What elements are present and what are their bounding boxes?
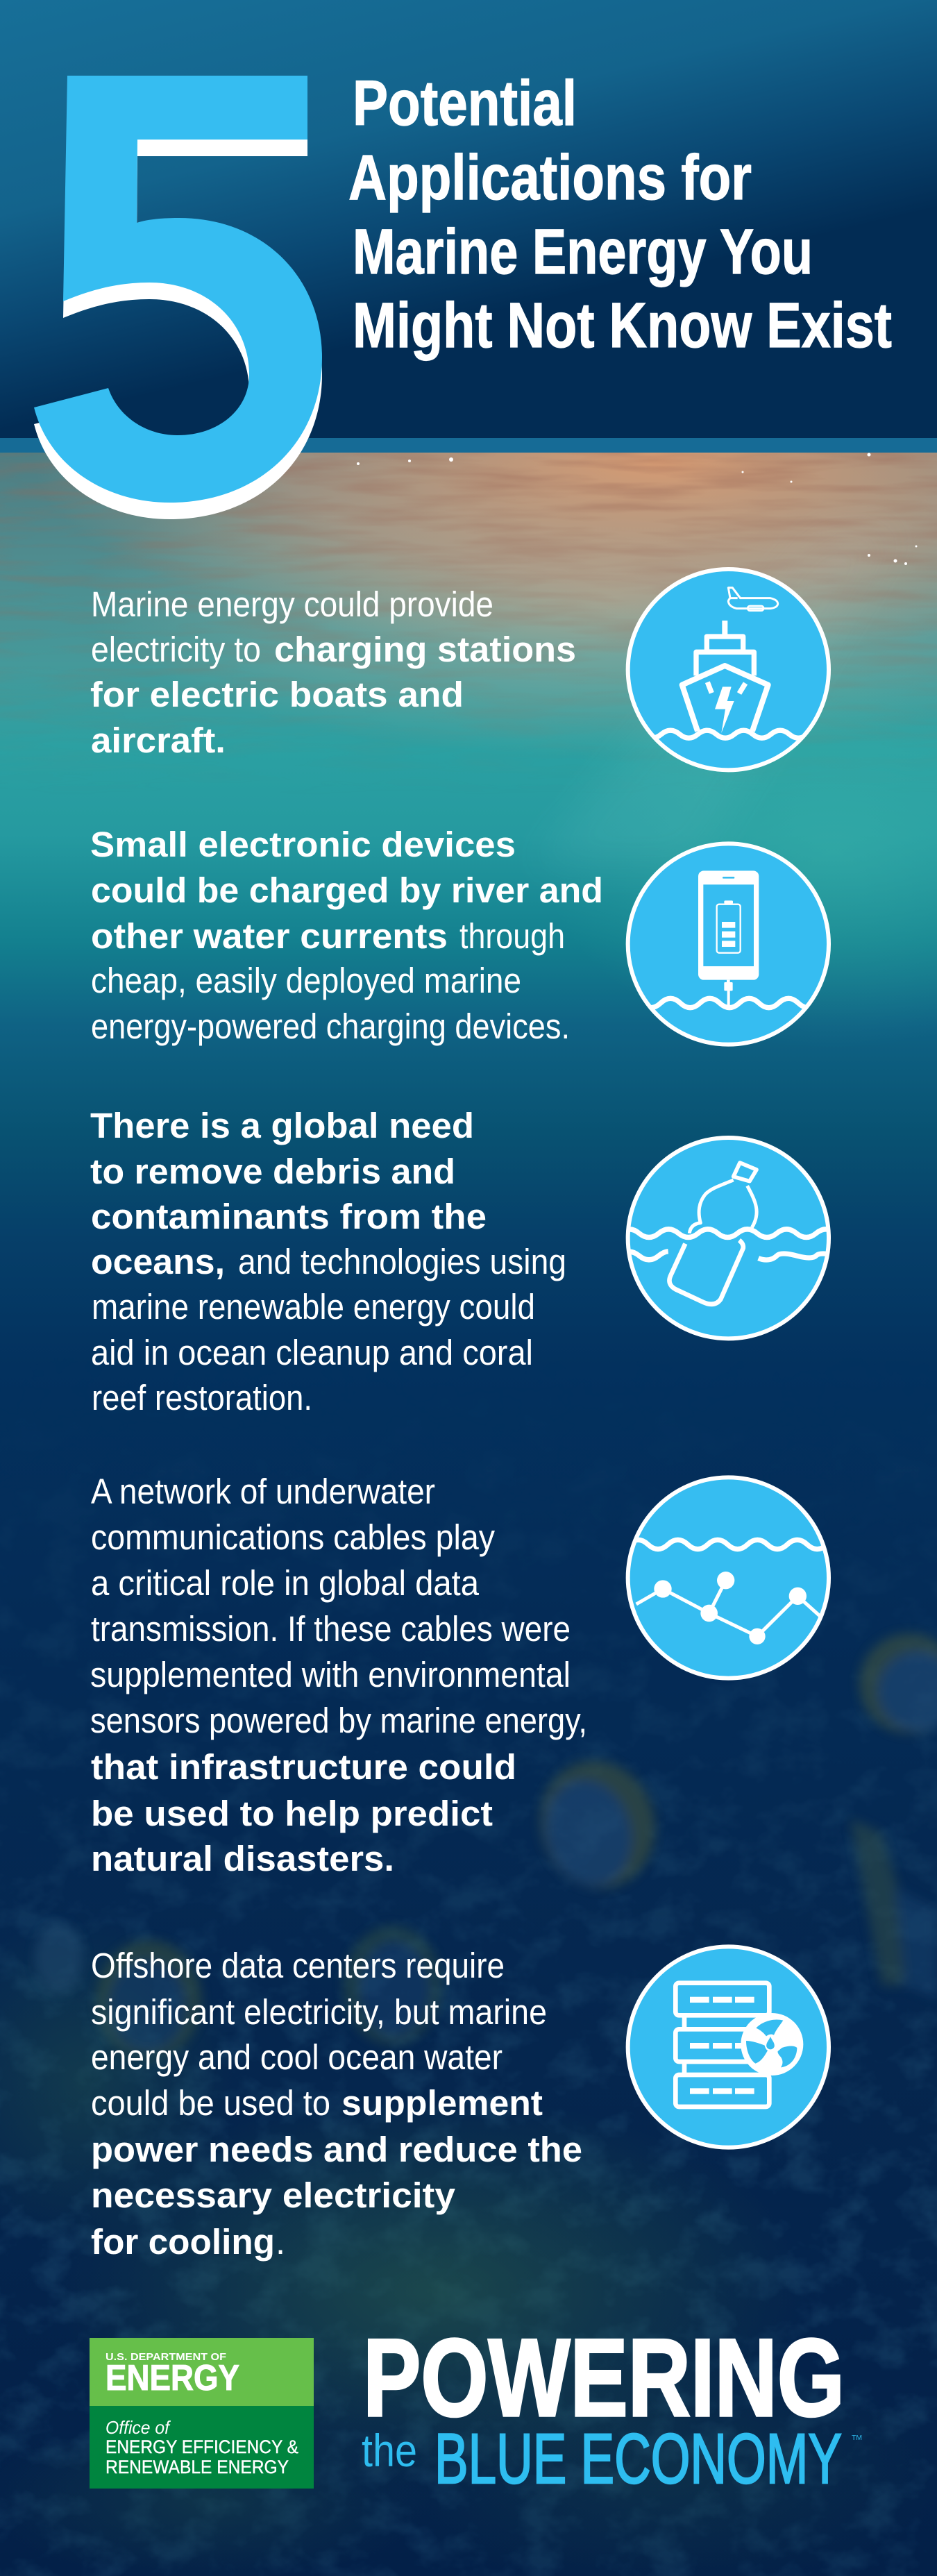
icon: sensor network under waves <box>628 1477 829 1678</box>
text: underwater cables and sensors: a critical role in global data <box>91 1563 480 1603</box>
text: small electronic devices: Small electronic devices <box>90 825 516 864</box>
text: offshore data centers: power needs and reduce the <box>91 2130 582 2169</box>
text: debris and contaminants: reef restoration. <box>92 1378 312 1417</box>
text: offshore data centers: Offshore data centers require <box>91 1946 505 1985</box>
text: debris and contaminants <box>90 1106 566 1417</box>
text: offshore data centers: could be used to <box>91 2083 330 2123</box>
text: offshore data centers: supplement <box>341 2083 543 2123</box>
water surface sparkles <box>357 453 918 708</box>
text: offshore data centers <box>91 1946 582 2262</box>
logo: Powering the Blue Economy: the <box>362 2425 417 2476</box>
logo: U.S. Department of Energy EERE: ENERGY EFFICIENCY & <box>105 2436 298 2457</box>
logo: U.S. Department of Energy EERE: ENERGY <box>105 2358 239 2398</box>
text: offshore data centers: for cooling <box>91 2222 275 2262</box>
logo: U.S. Department of Energy EERE <box>90 2338 314 2489</box>
text: offshore data centers: energy and cool ocean water <box>91 2037 503 2077</box>
text: offshore data centers: necessary electricity <box>91 2175 456 2215</box>
logo: U.S. Department of Energy EERE: Office of <box>105 2417 171 2438</box>
panel: application 1 <box>90 569 829 770</box>
text: small electronic devices: cheap, easily deployed marine <box>91 961 521 1000</box>
logo: Powering the Blue Economy: TM <box>852 2434 862 2442</box>
title <box>348 68 892 361</box>
text: debris and contaminants: contaminants from the <box>91 1197 487 1236</box>
text: small electronic devices <box>90 825 603 1046</box>
big numeral 5 <box>34 76 322 519</box>
text: charging stations: charging stations <box>274 630 576 669</box>
icon: floating bottle <box>619 1138 836 1338</box>
text: debris and contaminants: marine renewable energy could <box>92 1287 535 1327</box>
title: Marine Energy You <box>353 217 813 287</box>
logo: Powering the Blue Economy <box>362 2316 862 2498</box>
text: small electronic devices: could be charged by river and <box>91 870 603 910</box>
text: underwater cables and sensors: that infrastructure could <box>91 1747 516 1787</box>
text: underwater cables and sensors: supplemented with environmental <box>90 1655 571 1694</box>
icon: servers with cooling fan <box>628 1946 829 2148</box>
text: charging stations: aircraft. <box>91 721 226 760</box>
header banner <box>0 0 937 453</box>
text: charging stations: Marine energy could provide <box>91 584 493 624</box>
text: charging stations: electricity to <box>91 630 261 669</box>
text: underwater cables and sensors: communications cables play <box>91 1517 495 1557</box>
text: debris and contaminants: There is a global need <box>90 1106 474 1145</box>
text: small electronic devices: through <box>459 916 565 956</box>
text: debris and contaminants: and technologies using <box>238 1242 566 1281</box>
text: charging stations: for electric boats and <box>90 675 464 714</box>
text: offshore data centers: . <box>276 2222 285 2262</box>
text: small electronic devices: other water currents <box>91 916 448 956</box>
logo: U.S. Department of Energy EERE: RENEWABLE ENERGY <box>105 2457 289 2477</box>
text: underwater cables and sensors <box>90 1472 587 1878</box>
icon: ship and plane <box>628 569 829 770</box>
fish <box>35 1633 937 2058</box>
text: debris and contaminants: to remove debris and <box>90 1152 455 1191</box>
text: underwater cables and sensors: natural disasters. <box>91 1839 394 1878</box>
text: underwater cables and sensors: transmission. If these cables were <box>91 1609 571 1649</box>
text: underwater cables and sensors: sensors powered by marine energy, <box>90 1701 587 1740</box>
icon: phone charging from water <box>628 843 829 1045</box>
text: offshore data centers: significant electricity, but marine <box>91 1992 547 2032</box>
panel: application 4 <box>90 1472 829 1878</box>
title: Applications for <box>348 142 752 213</box>
text: underwater cables and sensors: be used to help predict <box>91 1794 493 1833</box>
panel: application 2 <box>90 825 829 1046</box>
title: Potential <box>353 68 577 139</box>
text: charging stations <box>90 584 576 760</box>
text: underwater cables and sensors: A network of underwater <box>91 1472 435 1511</box>
panel: application 3 <box>90 1106 836 1417</box>
text: small electronic devices: energy-powered charging devices. <box>91 1007 570 1046</box>
panel: application 5 <box>91 1946 829 2262</box>
text: debris and contaminants: oceans, <box>91 1242 225 1281</box>
text: debris and contaminants: aid in ocean cleanup and coral <box>91 1333 533 1372</box>
logo: U.S. Department of Energy EERE: U.S. DEPARTMENT OF <box>105 2351 226 2363</box>
